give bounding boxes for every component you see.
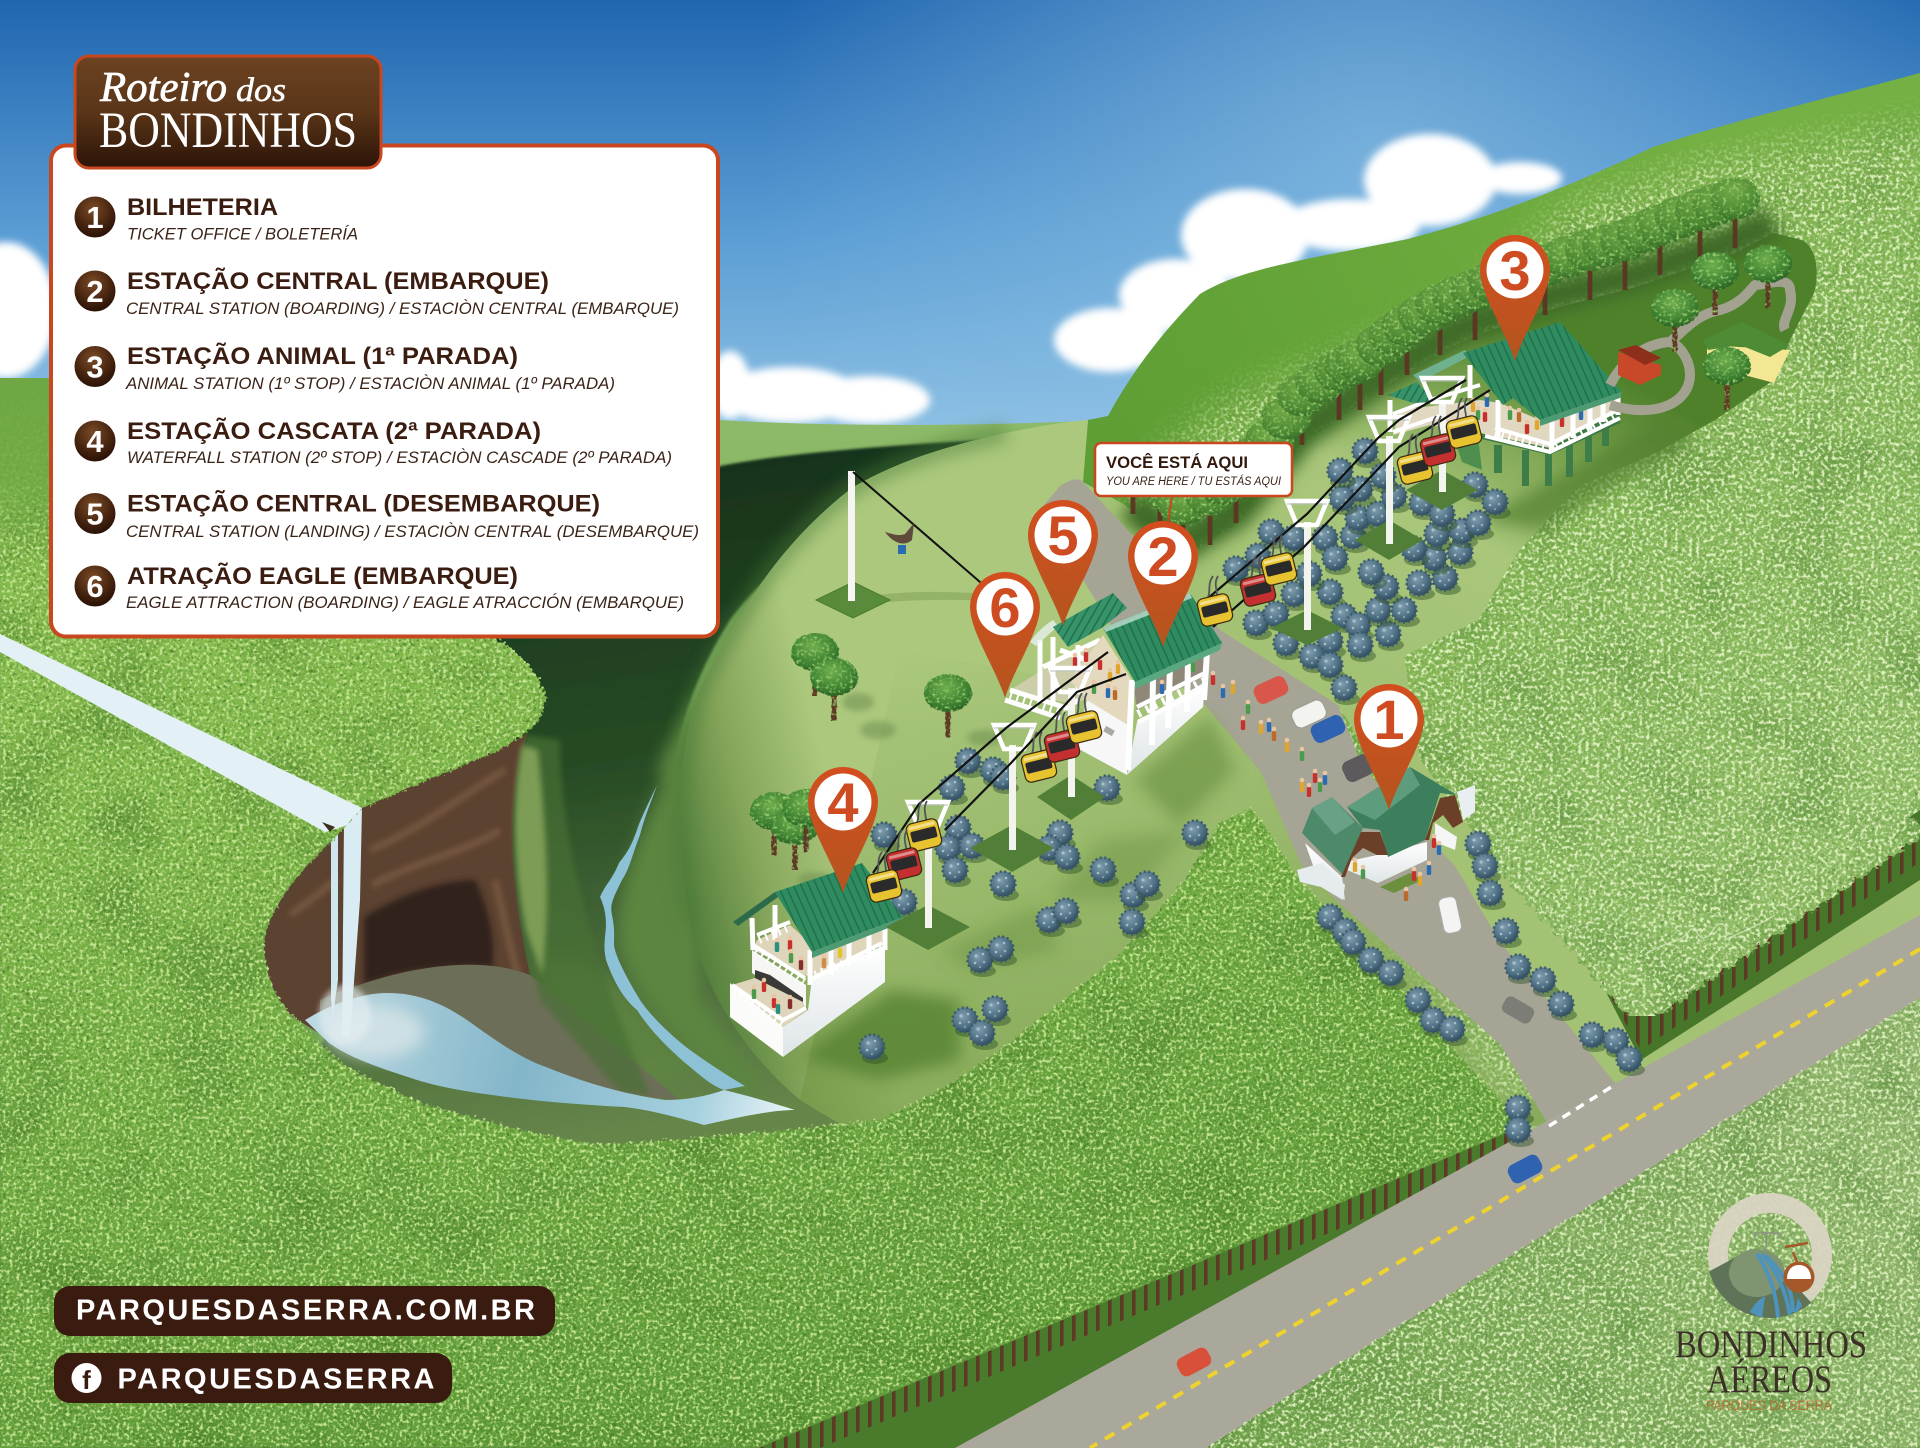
- white junction dashes: [1549, 1084, 1616, 1126]
- station 3 rails and posts: [1390, 365, 1620, 452]
- facebook pill: PARQUESDASERRA: [118, 1364, 435, 1396]
- waterfall stream top: [0, 634, 362, 832]
- legend item 5: CENTRAL STATION (LANDING) / ESTACIÒN CENTRAL (DESEMBARQUE): [126, 522, 699, 541]
- lake: [305, 993, 795, 1125]
- legend item 1: 1: [86, 200, 104, 235]
- left roof: [1302, 797, 1363, 875]
- legend item 2: [74, 267, 679, 318]
- left smooth hill top: [0, 378, 52, 548]
- cars: [1174, 674, 1545, 1379]
- cave interior: [364, 880, 493, 985]
- waterfall: [319, 808, 371, 1045]
- pin 1: [1354, 684, 1424, 810]
- legend item 4: WATERFALL STATION (2º STOP) / ESTACIÒN CASCADE (2º PARADA): [127, 448, 672, 467]
- artist signature: [1645, 915, 1775, 955]
- pin 2: 2: [1147, 525, 1179, 588]
- trunks: [1120, 206, 1748, 554]
- pin 6: 6: [989, 576, 1021, 639]
- legend item 5: [74, 490, 699, 541]
- clearing with shrubs and station 3 lawn: [1083, 233, 1920, 1095]
- callout: you are here: VOCÊ ESTÁ AQUI: [1106, 453, 1248, 472]
- legend item 6: ATRAÇÃO EAGLE (EMBARQUE): [127, 562, 518, 590]
- logo: Bondinhos Aéreos: AÉREOS: [1707, 1357, 1832, 1401]
- legend item 3: ESTAÇÃO ANIMAL (1ª PARADA): [127, 342, 518, 370]
- gray shore: [320, 965, 680, 1100]
- forest tree row above the clearing: [1108, 177, 1774, 554]
- title tab: dos: [236, 72, 286, 109]
- title tab: BONDINHOS: [99, 103, 357, 159]
- cable car towers: [886, 378, 1478, 950]
- station 4 rails and posts: [732, 905, 885, 1024]
- road side tree trunks: [759, 1128, 1535, 1448]
- cave: [264, 733, 680, 1100]
- central station building: [1005, 593, 1222, 775]
- callout: you are here: YOU ARE HERE / TU ESTÁS AQUI: [1106, 475, 1282, 488]
- legend item 3: [74, 342, 615, 393]
- station 3 animal station: [1388, 322, 1622, 486]
- central light slope: [618, 420, 1549, 1132]
- central roof: [1347, 767, 1457, 857]
- panel: route legend: [51, 146, 718, 636]
- bilheteria building: [1297, 767, 1475, 900]
- access road: [1040, 479, 1616, 1126]
- animal park path, red house and yellow house: [1610, 245, 1792, 410]
- pin 6: [970, 572, 1040, 698]
- legend item 1: TICKET OFFICE / BOLETERÍA: [127, 224, 358, 244]
- sky background: [0, 0, 1920, 520]
- pin 5: [1028, 500, 1098, 626]
- canopies: [1108, 177, 1760, 525]
- legend item 5: 5: [86, 496, 104, 532]
- legend item 4: ESTAÇÃO CASCATA (2ª PARADA): [127, 417, 541, 445]
- pin 1: 1: [1373, 688, 1405, 751]
- cables: [873, 380, 1490, 873]
- cave rock streaks: [290, 770, 518, 975]
- legend item 4: [74, 417, 672, 467]
- logo: Bondinhos Aéreos: BONDINHOS: [1675, 1323, 1867, 1366]
- logo cable car: [1784, 1243, 1814, 1292]
- facebook pill: f: [82, 1365, 91, 1395]
- front body: [1070, 635, 1133, 725]
- logo: Bondinhos Aéreos: PARQUES DA SERRA: [1706, 1397, 1833, 1413]
- back frame and deck: [1010, 640, 1100, 703]
- highway: [955, 915, 1920, 1448]
- dark valley: [300, 438, 1012, 1160]
- clouds: [0, 134, 1562, 424]
- pin 4: [808, 767, 878, 893]
- legend item 2: 2: [86, 274, 104, 309]
- legend item 2: ESTAÇÃO CENTRAL (EMBARQUE): [127, 267, 549, 295]
- river: [600, 785, 745, 1090]
- station 4 waterfall station: [730, 863, 903, 1057]
- lower left forest: [0, 382, 1518, 1448]
- title tab: Roteiro: [99, 65, 227, 111]
- legend item 3: ANIMAL STATION (1º STOP) / ESTACIÒN ANIMAL (1º PARADA): [125, 374, 615, 393]
- visitors: [1211, 671, 1441, 901]
- legend item 3: 3: [86, 350, 104, 384]
- logo: Bondinhos Aéreos: [1675, 1203, 1867, 1413]
- legend item 6: [74, 562, 684, 612]
- building shadows: [800, 420, 1700, 1080]
- callout: you are here: [1095, 443, 1292, 523]
- background hill: [0, 380, 1920, 1448]
- website pill: [54, 1286, 555, 1336]
- legend item 6: 6: [86, 569, 104, 604]
- pin 4: 4: [827, 771, 859, 834]
- facebook pill: [54, 1353, 452, 1403]
- upper right hill: [1083, 73, 1920, 1000]
- eagle zip line with pole: [816, 471, 1010, 618]
- lower right forest: [1200, 998, 1920, 1448]
- website pill: PARQUESDASERRA.COM.BR: [76, 1294, 535, 1326]
- pin 3: [1480, 235, 1550, 361]
- legend item 5: ESTAÇÃO CENTRAL (DESEMBARQUE): [127, 490, 600, 518]
- legend item 4: 4: [86, 424, 104, 459]
- title tab: [75, 56, 381, 168]
- yellow center line: [1090, 949, 1920, 1448]
- legend item 1: BILHETERIA: [127, 194, 278, 221]
- pin 5: 5: [1047, 504, 1079, 567]
- pin 3: 3: [1499, 239, 1531, 302]
- blue shrubs: [860, 438, 1645, 1147]
- logo mountain and waterfall: [1709, 1249, 1811, 1318]
- upper right forest: [1100, 90, 1920, 1100]
- gondolas: [865, 398, 1483, 903]
- legend item 2: CENTRAL STATION (BOARDING) / ESTACIÒN CENTRAL (EMBARQUE): [126, 299, 679, 318]
- legend item 6: EAGLE ATTRACTION (BOARDING) / EAGLE ATRACCIÓN (EMBARQUE): [126, 593, 684, 612]
- valley green bank: [515, 735, 650, 1095]
- legend item 1: [74, 194, 358, 244]
- right forest tree trunks: [1482, 810, 1920, 1060]
- slope trees: [750, 633, 1003, 888]
- pin 2: [1128, 521, 1198, 647]
- brown gable trims: [1341, 832, 1388, 877]
